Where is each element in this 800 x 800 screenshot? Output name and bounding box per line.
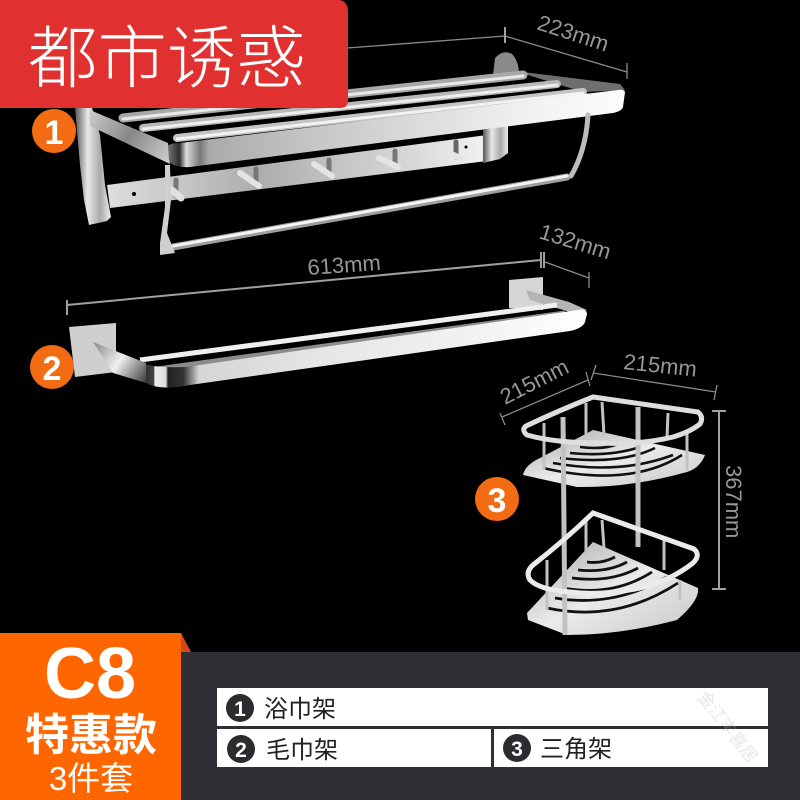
- badge 2: 2: [43, 350, 61, 388]
- corner shelf 3: [523, 397, 705, 635]
- set count: 3件套: [49, 760, 133, 797]
- badge 1: 1: [45, 114, 63, 152]
- front rail: [168, 90, 625, 167]
- orange fold: [181, 633, 191, 652]
- row: hand towel bar: 毛巾架: [266, 737, 338, 764]
- dimension: shelf 215mm, 215mm and 367mm: 367mm: [721, 465, 746, 538]
- rack bars: [123, 75, 583, 139]
- dimension: shelf 215mm, 215mm and 367mm: 215mm: [622, 349, 698, 382]
- lower slots: [547, 557, 678, 612]
- dimension: 223mm: 223mm: [534, 10, 612, 56]
- towel rack 1 with hooks: [75, 52, 625, 255]
- red logo banner: [0, 0, 348, 108]
- back side rail: [526, 290, 587, 312]
- row: hand towel bar: 2: [235, 739, 247, 762]
- right bracket: [483, 125, 508, 163]
- lower base plate: [527, 542, 698, 635]
- upper base plate: [523, 430, 705, 487]
- row: corner shelf: [494, 729, 768, 767]
- watermark: 金江丰喜居: [694, 688, 761, 766]
- back side rail: [515, 71, 625, 92]
- orange model panel: [0, 633, 181, 800]
- wall bracket top: [493, 52, 519, 76]
- towel bar and arms: [160, 115, 588, 255]
- dimension: shelf 215mm, 215mm and 367mm: [496, 349, 746, 589]
- hook plate: [107, 135, 487, 208]
- dimension: 613mm and 132mm: 613mm: [307, 250, 382, 280]
- left wall bracket: [75, 108, 111, 225]
- row: towel rack: 浴巾架: [264, 696, 336, 723]
- dimension: 223mm: [347, 10, 627, 79]
- bars: [140, 305, 557, 360]
- dimension: shelf 215mm, 215mm and 367mm: 215mm: [496, 354, 573, 409]
- posts: [544, 402, 687, 635]
- hooks: [172, 142, 460, 198]
- row: corner shelf: 3: [511, 738, 523, 761]
- row: corner shelf: 三角架: [540, 736, 612, 763]
- towel rack 2: [69, 277, 587, 388]
- wall plates: [509, 277, 543, 310]
- row: towel rack: [217, 688, 768, 726]
- upper slots: [543, 444, 682, 476]
- side rail: [90, 110, 170, 164]
- logo text: 都市诱惑: [28, 3, 306, 102]
- side rail: [93, 342, 146, 383]
- row: hand towel bar: [217, 729, 491, 767]
- badge 3: 3: [488, 482, 506, 520]
- badge 1: [32, 109, 76, 153]
- rims: [524, 397, 702, 443]
- front rail: [146, 310, 587, 388]
- model code: C8: [44, 634, 136, 714]
- badge 3: [475, 477, 519, 521]
- parts table: [217, 688, 768, 767]
- dimension: 613mm and 132mm: [67, 219, 614, 315]
- row: towel rack: 1: [234, 698, 246, 721]
- badge 2: [30, 345, 74, 389]
- dark info panel: [181, 652, 800, 800]
- dimension: 613mm and 132mm: 132mm: [537, 219, 614, 264]
- offer label: 特惠款: [25, 711, 157, 760]
